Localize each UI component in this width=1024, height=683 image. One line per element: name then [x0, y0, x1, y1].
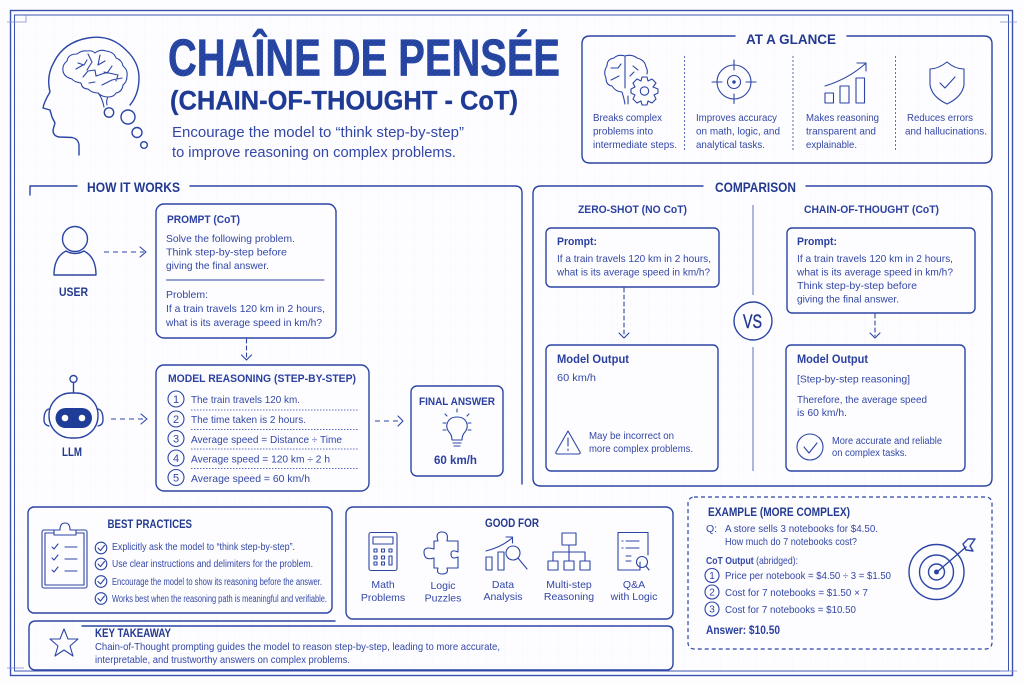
heading: key takeaway: KEY TAKEAWAY	[95, 626, 171, 640]
label: llm: LLM	[62, 445, 82, 459]
subtitle: Encourage the model to “think step-by-step”	[172, 124, 464, 141]
text: glance items: problems into	[593, 126, 653, 138]
card: model reasoning: 3	[173, 434, 179, 446]
text: glance items: Makes reasoning	[806, 112, 879, 124]
arrow: cot down	[870, 314, 880, 338]
card: cot prompt: what is its average speed in km/h?	[796, 266, 953, 278]
card: cot output: on complex tasks.	[832, 448, 907, 459]
card: prompt: what is its average speed in km/h?	[165, 317, 322, 329]
card: cot prompt: Think step-by-step before	[797, 280, 917, 292]
card: cot output: [Step-by-step reasoning]	[797, 374, 910, 386]
arrow: reasoning to answer	[375, 416, 403, 426]
card: zero-shot output: more complex problems.	[589, 443, 693, 455]
card: model reasoning: Average speed = Distance ÷ Time	[191, 434, 342, 446]
list: cot steps	[705, 568, 891, 616]
card: cot output: More accurate and reliable	[832, 436, 942, 447]
arrow: llm to reasoning	[111, 414, 147, 424]
panel: good for	[346, 507, 673, 619]
icon: data analysis	[486, 537, 527, 570]
heading: best practices: BEST PRACTICES	[108, 517, 192, 531]
icon: star	[50, 629, 78, 656]
card: cot prompt: giving the final answer.	[797, 294, 899, 306]
text: glance items: Improves accuracy	[696, 112, 778, 124]
text: answer: Answer: $10.50	[706, 623, 780, 637]
panel: example	[688, 497, 992, 649]
card: zero-shot prompt	[546, 228, 719, 287]
labels: good for items: Reasoning	[544, 591, 594, 603]
labels: good for items: Puzzles	[425, 592, 461, 604]
card: prompt: Problem:	[166, 289, 208, 301]
card: model reasoning: Average speed = 60 km/h	[191, 473, 310, 485]
text: takeaway	[95, 641, 500, 666]
text: glance items: explainable.	[806, 139, 857, 151]
title: (CHAIN-OF-THOUGHT - CoT)	[170, 86, 518, 116]
subtitle	[172, 124, 464, 161]
column heading: chain-of-thought: CHAIN-OF-THOUGHT (CoT)	[804, 204, 939, 216]
text: question: A store sells 3 notebooks for $4.50.	[725, 523, 878, 535]
card: cot output: Model Output	[797, 352, 868, 366]
text: glance items: intermediate steps.	[593, 139, 677, 151]
labels: good for items: Multi-step	[546, 579, 592, 591]
title	[168, 28, 560, 116]
labels: good for items	[361, 579, 657, 604]
text: glance items: Breaks complex	[593, 112, 663, 124]
arrow: prompt to reasoning	[242, 339, 252, 360]
card: final answer	[411, 386, 503, 476]
text: question: Q:	[706, 523, 717, 535]
list: best practices: Explicitly ask the model to “think step-by-step”.	[112, 542, 295, 553]
heading: good for: GOOD FOR	[485, 516, 539, 530]
icon: check circle	[797, 434, 823, 460]
card: prompt: If a train travels 120 km in 2 hours,	[166, 303, 325, 315]
card: prompt: giving the final answer.	[166, 260, 269, 272]
icon: flow tree	[548, 533, 590, 570]
text: glance items: transparent and	[806, 126, 876, 138]
icon: shield	[930, 62, 964, 104]
text: takeaway: interpretable, and trustworthy answers on complex problems.	[95, 654, 350, 666]
card: model reasoning: 4	[173, 453, 179, 465]
card: zero-shot output: Model Output	[557, 352, 629, 366]
list: best practices: Encourage the model to show its reasoning before the answer.	[112, 577, 322, 588]
icon: warning	[556, 431, 580, 454]
card: cot prompt: Prompt:	[797, 236, 837, 248]
card: model reasoning	[156, 365, 369, 491]
text: glance items: Reduces errors	[907, 112, 973, 124]
text: question	[706, 523, 878, 548]
card: zero-shot prompt: If a train travels 120 km in 2 hours,	[557, 253, 711, 265]
card: cot output: is 60 km/h.	[797, 407, 847, 419]
card: zero-shot prompt: Prompt:	[557, 236, 597, 248]
card: model reasoning: The time taken is 2 hours.	[191, 414, 306, 426]
list: best practices	[95, 542, 327, 605]
list: best practices: Works best when the reasoning path is meaningful and verifiable.	[112, 594, 327, 605]
icon: target	[712, 60, 756, 104]
label: user: USER	[59, 285, 88, 299]
list: cot steps: 3	[709, 604, 715, 616]
text: cot output label: CoT Output (abridged):	[706, 555, 798, 567]
list: cot steps: Price per notebook = $4.50 ÷ 3 = $1.50	[725, 570, 891, 582]
list: cot steps: 2	[709, 588, 715, 598]
text: glance items: analytical tasks.	[696, 139, 765, 151]
card: model reasoning: 5	[173, 472, 179, 484]
card: final answer: FINAL ANSWER	[419, 396, 495, 408]
icon: brain and gear	[605, 55, 658, 105]
card: zero-shot output: May be incorrect on	[589, 430, 674, 442]
card: prompt: PROMPT (CoT)	[167, 214, 240, 226]
labels: good for items: with Logic	[610, 591, 657, 603]
icon: head with brain	[43, 37, 147, 155]
panel: how it works	[30, 180, 522, 491]
panel: best practices	[28, 507, 332, 613]
vs badge	[734, 302, 772, 340]
arrow: user to prompt	[104, 247, 146, 257]
icon: rising chart	[825, 63, 866, 103]
labels: good for items: Data	[492, 579, 514, 591]
heading: comparison: COMPARISON	[715, 180, 796, 195]
card: cot prompt: If a train travels 120 km in 2 hours,	[797, 253, 953, 265]
labels: good for items: Q&A	[623, 579, 645, 591]
icon: target with arrow	[909, 539, 975, 600]
card: cot output: Therefore, the average speed	[797, 394, 927, 406]
heading: example: EXAMPLE (MORE COMPLEX)	[708, 505, 850, 519]
card: model reasoning: Average speed = 120 km ÷ 2 h	[191, 454, 330, 466]
labels: good for items: Logic	[430, 580, 456, 592]
text: glance items: on math, logic, and	[696, 126, 780, 138]
card: prompt	[156, 204, 336, 338]
vs badge: VS	[743, 312, 762, 333]
panel: key takeaway	[29, 621, 673, 670]
panel: comparison	[533, 180, 992, 486]
text: glance items	[593, 112, 987, 151]
labels: good for items: Problems	[361, 592, 405, 604]
card: zero-shot prompt: what is its average speed in km/h?	[556, 266, 710, 278]
card: prompt: Solve the following problem.	[166, 233, 295, 245]
heading: how it works: HOW IT WORKS	[87, 180, 180, 195]
text: takeaway: Chain-of-Thought prompting guides the model to reason step-by-step, leading to more accurate,	[95, 641, 500, 653]
icon: robot	[44, 376, 103, 438]
card: cot output	[786, 345, 965, 471]
card: model reasoning: MODEL REASONING (STEP-BY-STEP)	[168, 373, 356, 385]
column heading: zero-shot: ZERO-SHOT (NO CoT)	[578, 204, 687, 216]
card: zero-shot output: 60 km/h	[557, 372, 596, 384]
subtitle: to improve reasoning on complex problems.	[172, 144, 456, 161]
icon: puzzle	[424, 532, 458, 574]
card: model reasoning: The train travels 120 km.	[191, 394, 300, 406]
icon: light bulb	[443, 409, 471, 446]
icon: user	[54, 226, 96, 275]
card: final answer: 60 km/h	[434, 453, 477, 467]
list: cot steps: Cost for 7 notebooks = $1.50 × 7	[725, 587, 868, 599]
list: cot steps: 1	[709, 571, 715, 582]
card: prompt: Think step-by-step before	[166, 246, 287, 258]
labels: good for items: Math	[371, 579, 395, 591]
list: best practices: Use clear instructions and delimiters for the problem.	[112, 559, 313, 570]
panel: at a glance	[582, 31, 992, 163]
arrow: zero-shot down	[619, 288, 629, 338]
icon: calculator	[369, 532, 397, 570]
list: cot steps: Cost for 7 notebooks = $10.50	[725, 604, 856, 616]
card: model reasoning: 1	[173, 394, 179, 406]
labels: good for items: Analysis	[483, 591, 523, 603]
text: question: How much do 7 notebooks cost?	[725, 536, 857, 548]
card: model reasoning: 2	[173, 414, 179, 426]
card: cot prompt	[787, 228, 975, 313]
title: CHAÎNE DE PENSÉE	[168, 28, 560, 88]
icon: clipboard	[42, 523, 87, 588]
card: zero-shot output	[546, 345, 718, 471]
heading: at a glance: AT A GLANCE	[746, 31, 836, 47]
text: glance items: and hallucinations.	[905, 126, 987, 138]
icon: q and a document	[618, 532, 649, 570]
